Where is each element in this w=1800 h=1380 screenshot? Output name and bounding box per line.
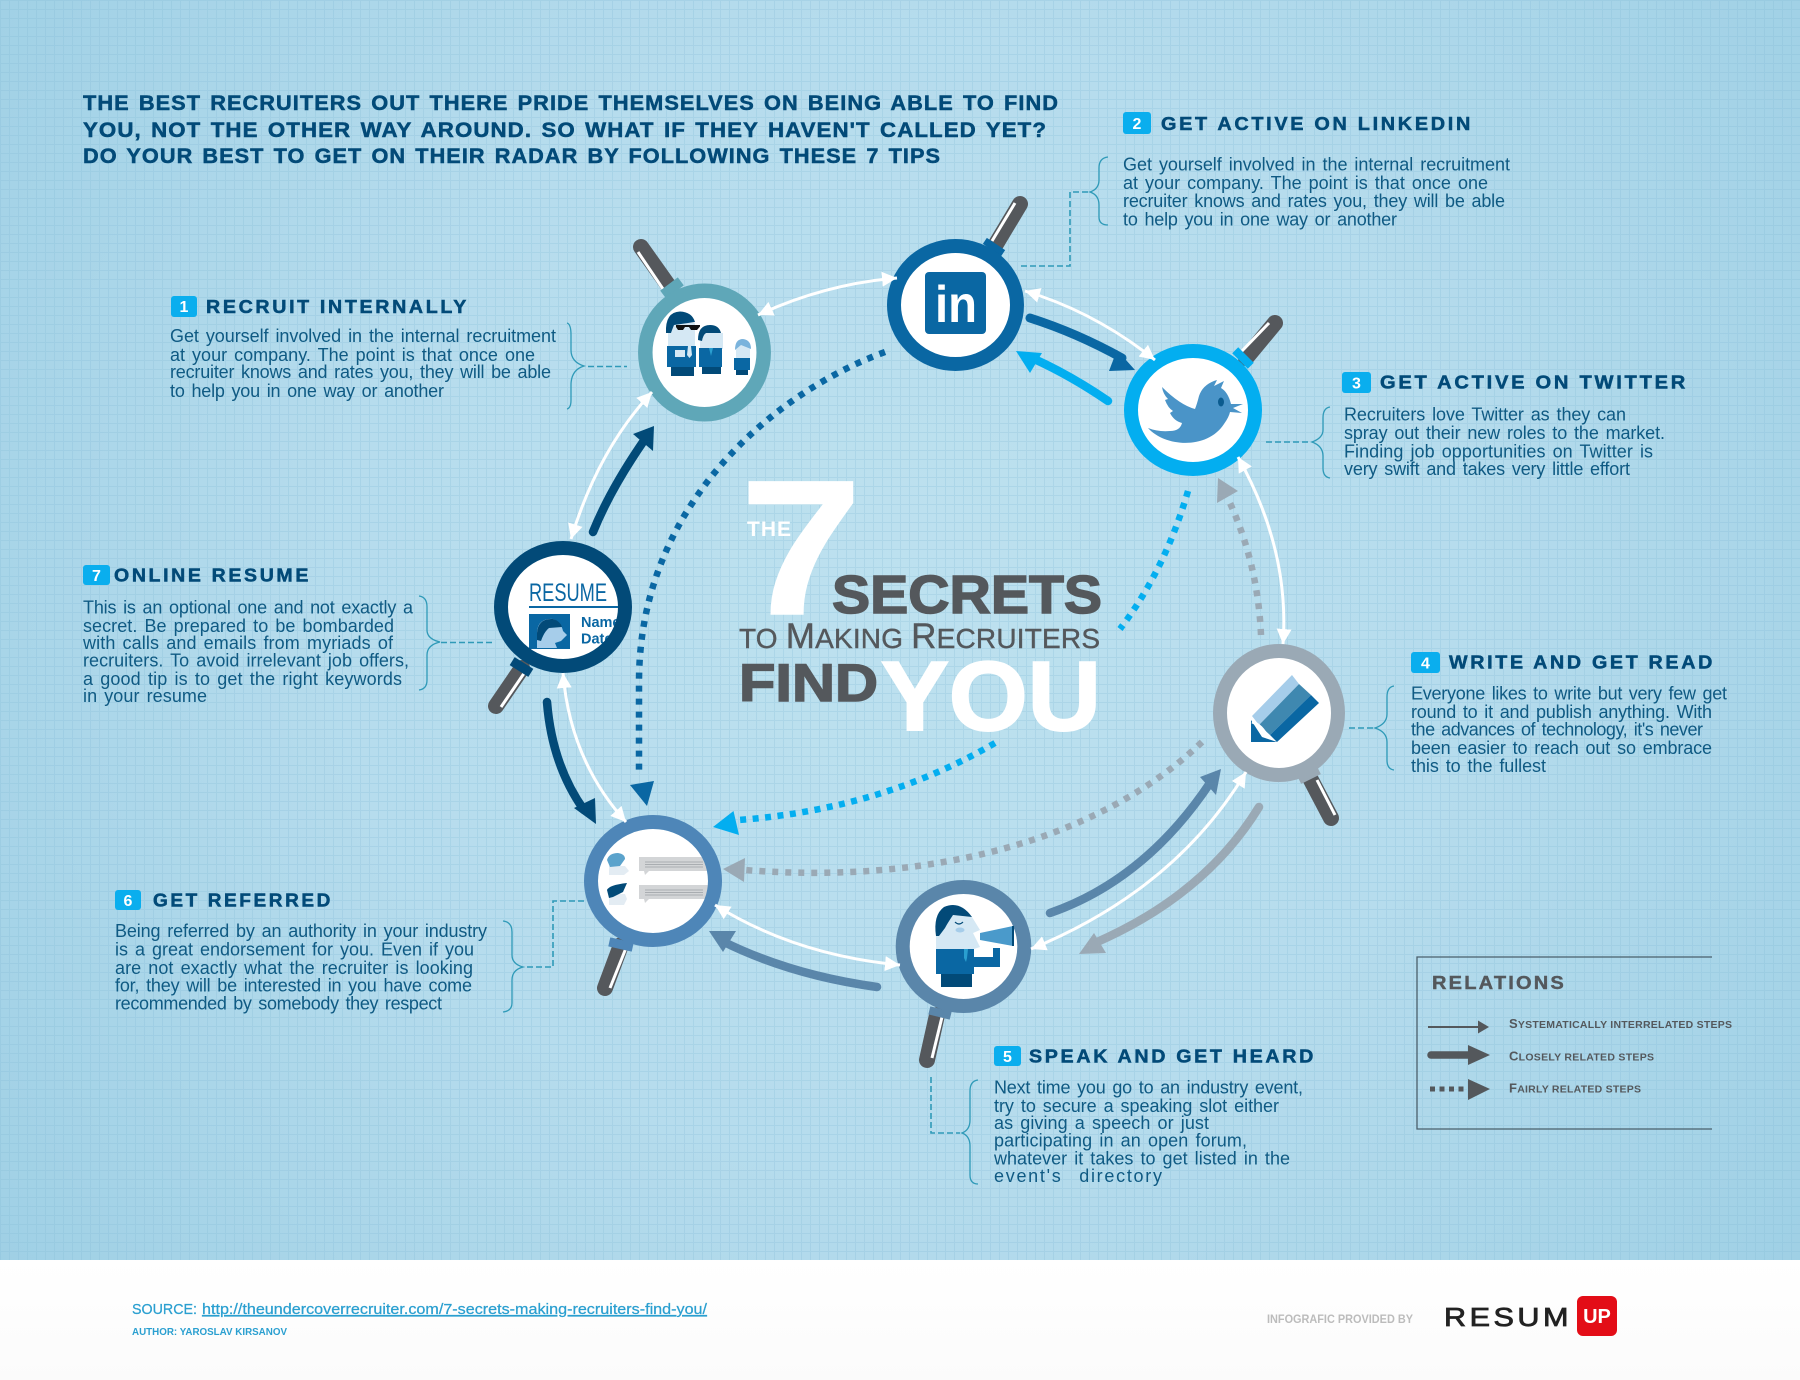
circle 2: linkedin (894, 203, 1020, 364)
source line: SOURCE: (132, 1301, 197, 1318)
arrows 7 and 1 (571, 392, 654, 539)
section 2: get active on linkedin: at your company. The point is that once one (1123, 173, 1488, 193)
section 7: online resume: 7 (92, 568, 101, 585)
section 2: get active on linkedin: GET ACTIVE ON LINKEDIN (1161, 113, 1473, 134)
center title: YOU (881, 641, 1101, 751)
section 7: online resume: recruiters. To avoid irrelevant job offers, (83, 650, 409, 670)
section 6: get referred: GET REFERRED (153, 890, 333, 910)
legend: relations (1417, 957, 1732, 1129)
intro text: THE BEST RECRUITERS OUT THERE PRIDE THEMSELVES ON BEING ABLE TO FIND (83, 92, 1059, 115)
section 7: online resume (82, 564, 493, 706)
intro text: DO YOUR BEST TO GET ON THEIR RADAR BY FOLLOWING THESE 7 TIPS (83, 145, 941, 168)
center title: THE (747, 518, 791, 541)
circle 4: pencil (1220, 651, 1338, 818)
section 1: recruit internally: to help you in one way or another (170, 381, 444, 401)
section 7: online resume: with calls and emails from myriads of (82, 633, 394, 653)
provided by: INFOGRAFIC PROVIDED BY (1267, 1314, 1413, 1326)
center title (739, 440, 1102, 751)
section 7: online resume: a good tip is to get the right keywords (83, 669, 402, 689)
arrows 5 and 6 (709, 905, 900, 987)
circle 6: referrals (591, 822, 715, 988)
footer (0, 1260, 1800, 1380)
center title: 7 (740, 440, 862, 655)
section 4: write and get read (1349, 652, 1727, 776)
arrows 4 and 5 (1031, 769, 1259, 954)
section 3: get active on twitter: Finding job opportunities on Twitter is (1344, 442, 1653, 462)
section 1: recruit internally: at your company. The point is that once one (170, 345, 535, 365)
icon: resume: Date (581, 632, 612, 648)
section 3: get active on twitter: GET ACTIVE ON TWITTER (1380, 372, 1688, 392)
logo: resumup: UP (1583, 1306, 1611, 1328)
section 3: get active on twitter: 3 (1352, 376, 1361, 392)
circle 1: people (638, 247, 764, 414)
section 2: get active on linkedin: to help you in one way or another (1123, 210, 1397, 230)
icon: resume: RESUME (529, 579, 607, 607)
section 4: write and get read: 4 (1421, 656, 1430, 672)
center title: FIND (739, 654, 878, 713)
arrows 3 and 4 (1217, 457, 1284, 644)
source line: http://theundercoverrecruiter.com/7-secrets-making-recruiters-find-you/ (202, 1301, 708, 1318)
circle 3: twitter (1131, 323, 1275, 469)
dotted arrow 2 to 6 (630, 352, 885, 806)
legend item: thick arrow: CLOSELY RELATED STEPS (1509, 1048, 1654, 1064)
section 5: speak and get heard: whatever it takes to get listed in the (993, 1148, 1290, 1168)
legend item: thin arrow: SYSTEMATICALLY INTERRELATED STEPS (1509, 1016, 1732, 1031)
section 2: get active on linkedin: 2 (1133, 116, 1142, 133)
icon: resume (529, 579, 621, 649)
section 7: online resume: This is an optional one and not exactly a (83, 598, 414, 618)
icon: bird (1148, 380, 1243, 443)
arrows 2 and 3 (1016, 291, 1155, 401)
section 1: recruit internally: Get yourself involved in the internal recruitment (170, 326, 556, 346)
section 3: get active on twitter: very swift and takes very little effort (1344, 459, 1630, 479)
section 4: write and get read: WRITE AND GET READ (1449, 652, 1715, 672)
section 4: write and get read: round to it and publish anything. With (1411, 702, 1712, 722)
icon: pencil (1251, 675, 1319, 742)
section 6: get referred (115, 890, 584, 1014)
section 4: write and get read: Everyone likes to write but very few get (1411, 684, 1727, 704)
dotted arrow 4 to 6 (723, 742, 1202, 882)
center title: TO MAKING RECRUITERS (739, 617, 1100, 656)
logo: resumup: RESUM (1444, 1302, 1572, 1332)
section 5: speak and get heard (931, 1046, 1316, 1186)
section 5: speak and get heard: 5 (1003, 1049, 1012, 1066)
section 4: write and get read: been easier to reach out so embrace (1411, 738, 1712, 758)
section 3: get active on twitter: Recruiters love Twitter as they can (1344, 404, 1626, 424)
section 2: get active on linkedin: Get yourself involved in the internal recruitment (1123, 154, 1510, 174)
section 2: get active on linkedin: recruiter knows and rates you, they will be able (1123, 191, 1505, 211)
section 3: get active on twitter (1266, 372, 1688, 479)
section 4: write and get read: the advances of technology, it's never (1411, 720, 1703, 740)
section 6: get referred: are not exactly what the recruiter is looking (115, 958, 473, 978)
section 6: get referred: recommended by somebody they respect (115, 994, 442, 1014)
section 6: get referred: for, they will be interested in you have come (115, 976, 472, 996)
section 1: recruit internally (170, 296, 627, 409)
logo: resumup (1444, 1296, 1617, 1336)
intro text: YOU, NOT THE OTHER WAY AROUND. SO WHAT IF THEY HAVEN'T CALLED YET? (83, 119, 1047, 142)
legend: relations: RELATIONS (1432, 972, 1566, 993)
section 3: get active on twitter: spray out their new roles to the market. (1344, 423, 1665, 443)
legend item: dotted arrow (1430, 1079, 1641, 1100)
section 7: online resume: in your resume (83, 686, 207, 706)
intro text (83, 92, 1059, 168)
icon: linkedin: in (935, 276, 977, 334)
section 5: speak and get heard: participating in an open forum, (994, 1130, 1247, 1150)
icon: people (666, 312, 751, 376)
author: AUTHOR: YAROSLAV KIRSANOV (132, 1326, 287, 1338)
center title: SECRETS (832, 565, 1102, 625)
icon: speaker with megaphone (935, 905, 1014, 987)
icon: resume: Name (581, 615, 620, 631)
section 5: speak and get heard: Next time you go to an industry event, (994, 1078, 1303, 1098)
legend item: thin arrow (1428, 1016, 1732, 1034)
section 1: recruit internally: RECRUIT INTERNALLY (206, 296, 469, 317)
section 1: recruit internally: 1 (180, 299, 189, 316)
section 6: get referred: 6 (124, 893, 133, 910)
section 1: recruit internally: recruiter knows and rates you, they will be able (170, 362, 551, 382)
section 5: speak and get heard: as giving a speech or just (994, 1113, 1209, 1133)
section 5: speak and get heard: event's directory (994, 1166, 1162, 1186)
legend item: dotted arrow: FAIRLY RELATED STEPS (1509, 1080, 1641, 1096)
section 6: get referred: is a great endorsement for you. Even if you (115, 940, 474, 960)
section 4: write and get read: this to the fullest (1411, 756, 1546, 776)
icon: heads and speech bubbles (607, 853, 709, 905)
circle 7: resume (496, 548, 625, 707)
section 5: speak and get heard: SPEAK AND GET HEARD (1029, 1046, 1316, 1066)
section 7: online resume: secret. Be prepared to be bombarded (83, 616, 394, 636)
dotted arrow 3 to 6 (713, 491, 1188, 835)
section 6: get referred: Being referred by an authority in your industry (115, 921, 487, 941)
section 7: online resume: ONLINE RESUME (114, 564, 311, 586)
circle 5: speaker (903, 887, 1024, 1060)
arrows 1 and 2 (758, 278, 897, 315)
section 5: speak and get heard: try to secure a speaking slot either (994, 1096, 1279, 1116)
section 2: get active on linkedin (1018, 112, 1510, 266)
arrows 6 and 7 (547, 673, 626, 824)
legend item: thick arrow (1431, 1045, 1654, 1065)
